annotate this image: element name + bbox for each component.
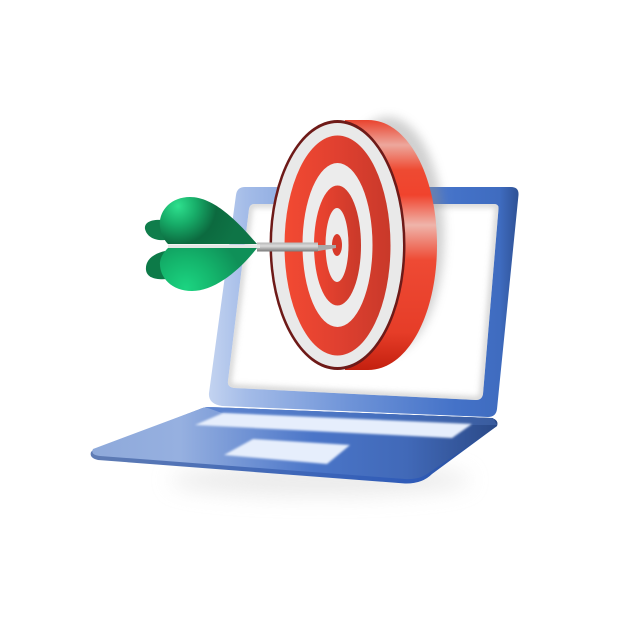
ground shadow [170, 465, 470, 495]
target [270, 117, 444, 370]
laptop [91, 187, 519, 484]
target shadow [332, 117, 444, 353]
touchpad [224, 439, 350, 464]
feather spine [168, 244, 260, 248]
shaft [257, 242, 318, 252]
laptop base [91, 407, 497, 484]
illustration: laptop with target and dart [90, 113, 519, 498]
target face [270, 120, 406, 370]
laptop screen [228, 204, 499, 400]
needle [318, 245, 336, 251]
top flight [160, 197, 257, 244]
back flights [145, 220, 165, 240]
target side [345, 120, 437, 370]
keyboard strip [195, 413, 472, 438]
dart [145, 197, 336, 291]
bottom flight [160, 248, 257, 291]
laptop lid [209, 187, 519, 417]
